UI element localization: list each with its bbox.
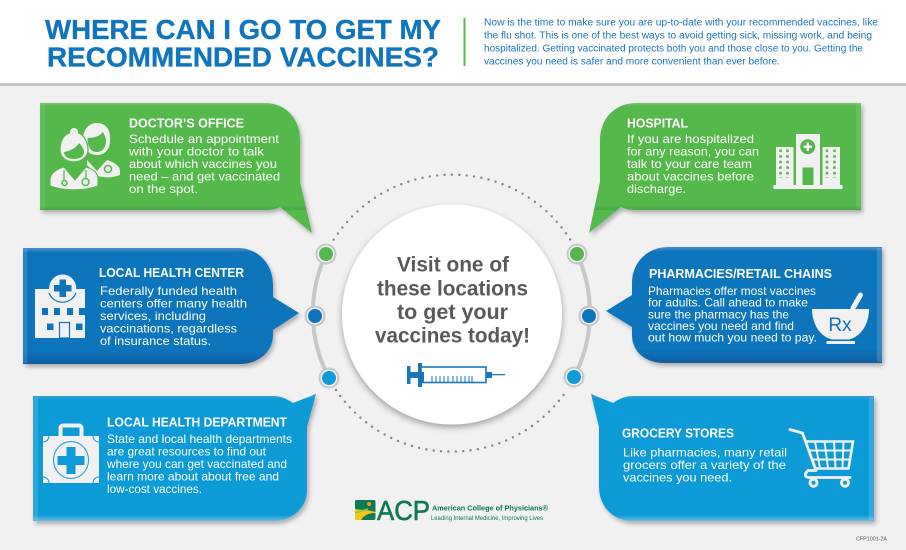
icon: mortar and pestle: Rx bbox=[828, 315, 852, 336]
center connector ring bbox=[313, 175, 590, 452]
ACP logo: ACP bbox=[377, 495, 430, 526]
central message: vaccines today! bbox=[375, 324, 530, 348]
text block: about vaccines before bbox=[627, 170, 754, 184]
text block: discharge. bbox=[627, 182, 686, 196]
heading: LOCAL HEALTH CENTER bbox=[99, 266, 244, 280]
connector nodes bbox=[306, 244, 598, 388]
panel: pharmacies and retail chains bbox=[606, 247, 882, 363]
text block: out how much you need to pay. bbox=[648, 331, 817, 345]
intro text: hospitalized. Getting vaccinated protects both you and those close to you. Getting the bbox=[484, 44, 863, 54]
text block: on the spot. bbox=[129, 182, 198, 196]
text block bbox=[106, 432, 292, 496]
central message: Visit one of bbox=[397, 254, 510, 276]
text block: vaccines you need and find bbox=[648, 319, 794, 333]
text block: learn more about about free and bbox=[107, 470, 279, 484]
title: RECOMMENDED VACCINES? bbox=[47, 42, 439, 72]
icon: medical kit bbox=[43, 426, 99, 483]
text block: of insurance status. bbox=[100, 334, 211, 348]
text block: services, including bbox=[100, 309, 206, 323]
heading: DOCTOR’S OFFICE bbox=[129, 116, 244, 130]
ACP logo: American College of Physicians® bbox=[432, 504, 548, 512]
text block: State and local health departments bbox=[107, 432, 292, 446]
document code: CFP1001-2A bbox=[856, 537, 887, 543]
text block bbox=[128, 132, 280, 196]
text block: Schedule an appointment bbox=[129, 132, 280, 146]
text block: sure the pharmacy has the bbox=[648, 307, 789, 321]
panel: local health department bbox=[33, 394, 316, 521]
text block: are great resources to find out bbox=[107, 445, 267, 459]
icon: doctors bbox=[50, 123, 120, 190]
text block: for any reason, you can bbox=[627, 144, 759, 158]
ACP logo bbox=[355, 495, 548, 526]
text block: with your doctor to talk bbox=[128, 144, 264, 158]
heading: PHARMACIES/RETAIL CHAINS bbox=[649, 267, 832, 281]
panel: grocery stores bbox=[591, 394, 874, 521]
text block: where you can get vaccinated and bbox=[106, 457, 287, 471]
text block: low-cost vaccines. bbox=[107, 482, 202, 496]
text block bbox=[648, 284, 817, 345]
icon: ACP emblem bbox=[355, 500, 376, 520]
intro text: the flu shot. This is one of the best ways to avoid getting sick, missing work, and being bbox=[484, 30, 872, 42]
icon: hospital building bbox=[774, 134, 842, 189]
text block: vaccines you need. bbox=[623, 471, 732, 485]
central message bbox=[375, 254, 530, 348]
text block: centers offer many health bbox=[100, 296, 247, 310]
text block: talk to your care team bbox=[627, 157, 752, 171]
icon: shopping cart bbox=[790, 430, 853, 486]
text block: Pharmacies offer most vaccines bbox=[648, 284, 816, 298]
heading: GROCERY STORES bbox=[622, 427, 734, 441]
panel: hospital bbox=[589, 103, 861, 233]
panel: local health center bbox=[23, 248, 299, 364]
panel: doctor's office bbox=[40, 103, 312, 233]
text block: need – and get vaccinated bbox=[129, 170, 280, 184]
text block bbox=[100, 284, 247, 348]
text block: about which vaccines you bbox=[129, 157, 277, 171]
text block bbox=[623, 446, 787, 485]
title bbox=[45, 14, 441, 72]
icon: mortar and pestle bbox=[812, 295, 869, 344]
ACP logo: Leading Internal Medicine, Improving Lives bbox=[431, 515, 544, 522]
text block: vaccinations, regardless bbox=[100, 322, 237, 336]
text block bbox=[627, 132, 759, 196]
central message: these locations bbox=[377, 278, 528, 300]
central message: to get your bbox=[397, 301, 508, 324]
intro text: Now is the time to make sure you are up-to-date with your recommended vaccines, like bbox=[484, 18, 878, 28]
text block: Like pharmacies, many retail bbox=[623, 446, 787, 460]
icon: syringe bbox=[407, 363, 505, 387]
text block: grocers offer a variety of the bbox=[623, 458, 786, 472]
icon: clinic bbox=[35, 274, 85, 338]
text block: Federally funded health bbox=[100, 284, 237, 298]
heading: HOSPITAL bbox=[627, 116, 688, 130]
title: WHERE CAN I GO TO GET MY bbox=[45, 14, 441, 45]
central circle bbox=[342, 204, 562, 424]
intro text: vaccines you need is safer and more convenient than ever before. bbox=[484, 56, 780, 67]
text block: If you are hospitalized bbox=[627, 132, 754, 146]
intro text bbox=[484, 18, 878, 67]
heading: LOCAL HEALTH DEPARTMENT bbox=[107, 416, 287, 430]
text block: for adults. Call ahead to make bbox=[648, 296, 808, 310]
